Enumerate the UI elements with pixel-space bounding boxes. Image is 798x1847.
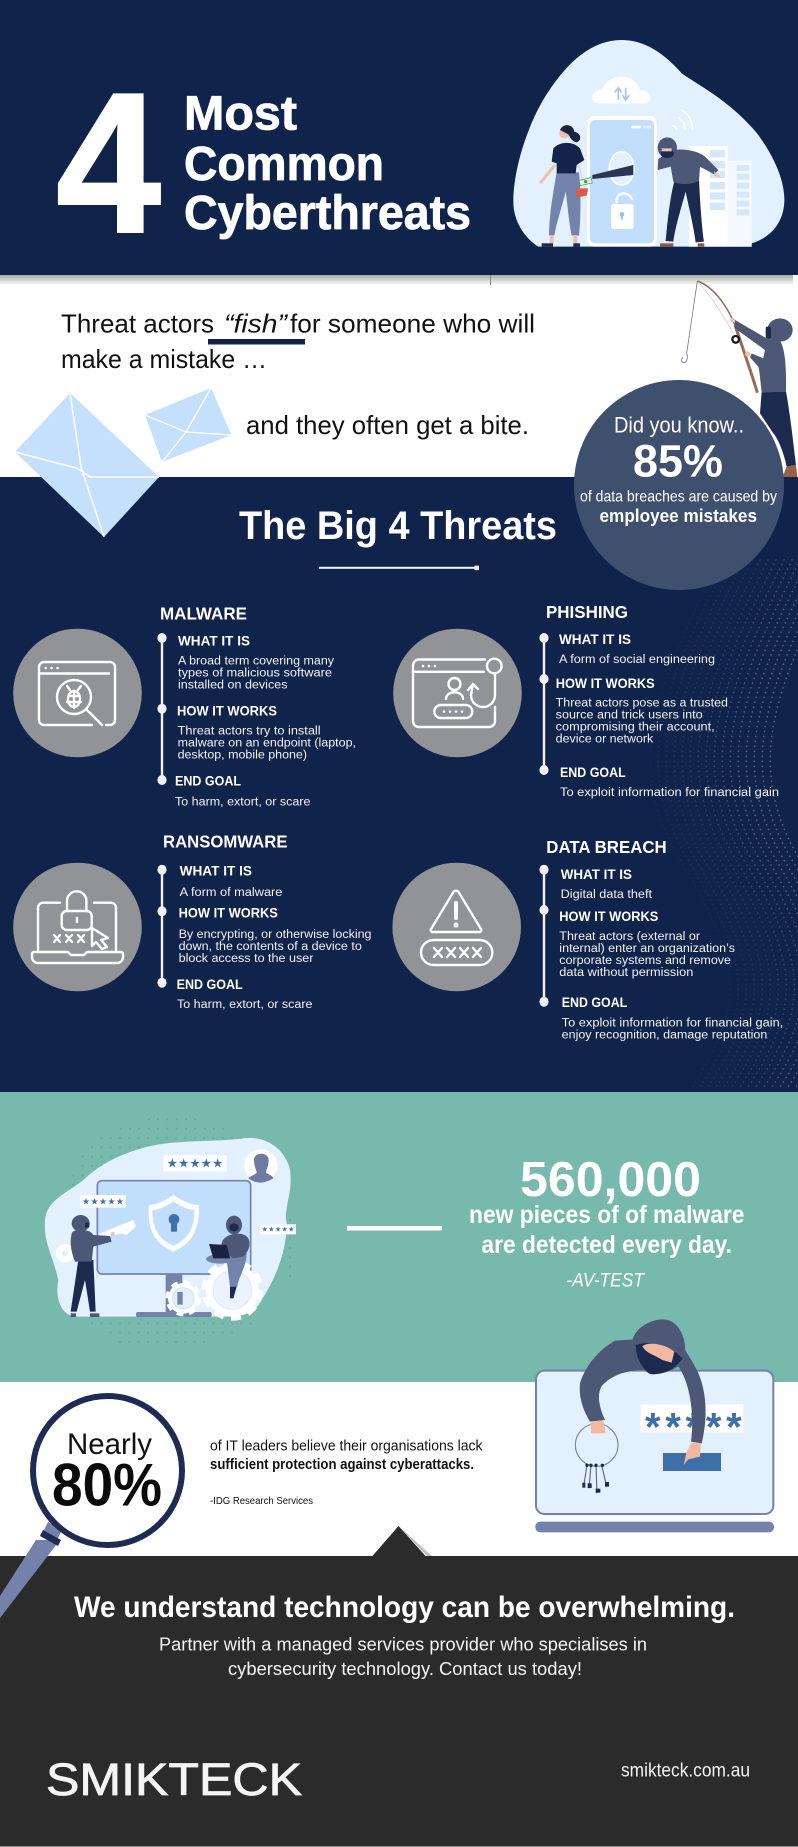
statement line 2: sufficient protection against cyberattacks. xyxy=(210,1457,474,1473)
magnifier lens xyxy=(33,1396,182,1545)
ransomware how it works: By encrypting, or otherwise locking xyxy=(179,929,372,941)
data breach what it is: WHAT IT IS xyxy=(561,867,632,882)
phishing end goal: To exploit information for financial gain xyxy=(560,787,779,799)
call to action heading: We understand technology can be overwhelming. xyxy=(74,1591,735,1624)
title line 2: Common xyxy=(184,138,384,191)
ransomware how it works xyxy=(179,906,372,965)
data breach heading: DATA BREACH xyxy=(546,837,667,857)
malware how it works: Threat actors try to install xyxy=(178,725,321,737)
phishing icon xyxy=(393,629,522,757)
malware how it works: malware on an endpoint (laptop, xyxy=(178,737,356,749)
data breach what it is: Digital data theft xyxy=(561,889,653,901)
divider rule xyxy=(347,1226,442,1230)
ransomware how it works: down, the contents of a device to xyxy=(179,941,362,953)
crouching thief xyxy=(580,1319,706,1465)
data breach end goal: To exploit information for financial gain, xyxy=(562,1018,783,1030)
icon: wifi xyxy=(672,110,692,130)
woman xyxy=(540,125,588,247)
icon: cloud xyxy=(592,77,650,103)
line 1 start: Threat actors xyxy=(61,309,214,339)
statistic figure: 560,000 xyxy=(520,1153,701,1207)
callout figure: 85% xyxy=(633,436,723,487)
website: smikteck.com.au xyxy=(621,1761,750,1782)
phishing heading: PHISHING xyxy=(546,602,628,622)
phishing how it works: Threat actors pose as a trusted xyxy=(556,698,728,710)
malware end goal: To harm, extort, or scare xyxy=(175,797,310,809)
emphasised word: “fish” xyxy=(224,309,288,339)
statistic line 1: new pieces of of malware xyxy=(469,1201,745,1229)
password field large: ★★★★★ xyxy=(167,1155,223,1170)
malware what it is: types of malicious software xyxy=(178,668,332,680)
data breach end goal xyxy=(562,995,783,1042)
icon: large envelope xyxy=(15,393,159,537)
malware end goal xyxy=(175,774,310,809)
underline xyxy=(208,339,305,344)
malware heading: MALWARE xyxy=(160,603,247,623)
magnifier text: Nearly xyxy=(67,1428,152,1461)
phishing end goal xyxy=(560,765,779,799)
avatar xyxy=(244,1149,278,1183)
monitor xyxy=(97,1181,251,1317)
malware timeline xyxy=(157,633,167,785)
logo: SMIKTECK xyxy=(46,1754,302,1805)
teal illustration: password theft xyxy=(45,1119,296,1342)
gears xyxy=(167,1262,260,1318)
callout intro: Did you know.. xyxy=(614,413,744,438)
phishing what it is: WHAT IT IS xyxy=(559,632,631,647)
statement source: -IDG Research Services xyxy=(210,1496,313,1507)
magnifying glass xyxy=(0,1396,182,1618)
ransomware what it is: A form of malware xyxy=(180,887,282,899)
statistic: new malware xyxy=(469,1153,745,1292)
call to action xyxy=(74,1591,735,1679)
laptop screen xyxy=(536,1371,773,1514)
fisherman illustration xyxy=(682,281,797,477)
data breach end goal: enjoy recognition, damage reputation xyxy=(562,1030,767,1042)
password field side: ★★★★★ xyxy=(262,1226,294,1234)
fishing reel xyxy=(732,336,739,343)
phone xyxy=(587,116,657,247)
panel: malware xyxy=(13,603,356,809)
title numeral: 4 xyxy=(56,52,161,275)
laptop base xyxy=(535,1522,774,1532)
data breach how it works: corporate systems and remove xyxy=(559,955,731,967)
phishing how it works: HOW IT WORKS xyxy=(556,676,655,691)
malware what it is: installed on devices xyxy=(178,680,288,692)
server racks xyxy=(689,146,752,247)
data breach how it works xyxy=(559,909,735,979)
callout disc xyxy=(574,380,784,590)
phishing how it works: source and trick users into xyxy=(556,710,703,722)
footer bottom edge xyxy=(0,1846,798,1847)
callout: 85 percent circle xyxy=(574,380,784,590)
magnifier collar xyxy=(40,1530,61,1546)
panel: fish intro text xyxy=(61,309,535,440)
ransomware how it works: HOW IT WORKS xyxy=(179,906,278,921)
malware how it works: desktop, mobile phone) xyxy=(178,749,307,761)
submit button xyxy=(663,1453,721,1471)
phishing what it is xyxy=(559,632,715,666)
ransomware icon xyxy=(13,863,142,991)
section heading: The Big 4 Threats xyxy=(239,504,557,548)
hero illustration: thief reaching through phone xyxy=(513,40,784,247)
data breach how it works: Threat actors (external or xyxy=(559,931,700,943)
dot pattern xyxy=(73,1119,290,1342)
panel: ransomware xyxy=(13,832,371,1011)
data breach end goal: END GOAL xyxy=(562,995,627,1010)
ransomware timeline xyxy=(157,865,167,988)
ransomware heading: RANSOMWARE xyxy=(163,832,288,852)
thief xyxy=(658,137,721,247)
hero blob xyxy=(513,40,784,247)
data breach how it works: HOW IT WORKS xyxy=(559,909,658,924)
password field: ***** xyxy=(645,1405,742,1449)
malware how it works xyxy=(177,704,356,761)
callout text: of data breaches are caused by xyxy=(580,489,777,506)
data breach icon xyxy=(392,863,521,991)
dark footer band xyxy=(0,1556,798,1846)
laptop thief illustration xyxy=(535,1319,774,1532)
ransomware end goal: END GOAL xyxy=(177,977,243,992)
title line 1: Most xyxy=(184,88,297,140)
phishing how it works xyxy=(556,676,728,746)
ransomware what it is: WHAT IT IS xyxy=(180,864,252,879)
key ring xyxy=(575,1424,618,1493)
heading rule xyxy=(319,566,479,570)
stolen money and arm xyxy=(579,165,633,186)
fishing rod xyxy=(697,281,757,393)
blob xyxy=(45,1138,291,1317)
statistic source: -AV-TEST xyxy=(566,1271,645,1292)
ransomware end goal xyxy=(177,977,312,1011)
malware what it is xyxy=(178,634,334,692)
statistic line 2: are detected every day. xyxy=(481,1231,732,1259)
line 2: make a mistake … xyxy=(61,344,267,374)
magnifier figure: 80% xyxy=(52,1452,162,1519)
ransomware end goal: To harm, extort, or scare xyxy=(177,999,312,1011)
phishing what it is: A form of social engineering xyxy=(559,654,715,666)
header shadow xyxy=(0,275,793,285)
fishing line and hook xyxy=(682,281,697,363)
title line 3: Cyberthreats xyxy=(184,187,471,240)
malware what it is: WHAT IT IS xyxy=(178,634,250,649)
fisherman hoodie xyxy=(730,318,793,393)
statement line 1: of IT leaders believe their organisations lack xyxy=(210,1439,483,1455)
callout emphasis: employee mistakes xyxy=(600,506,757,526)
shield xyxy=(149,1195,199,1252)
fisherman legs xyxy=(760,392,796,467)
dotted wave background xyxy=(650,560,798,1090)
teal statistic band xyxy=(0,1092,798,1382)
malware what it is: A broad term covering many xyxy=(178,656,334,668)
phishing timeline xyxy=(539,633,549,775)
navy threats section background xyxy=(0,477,798,1092)
footer pointer xyxy=(372,1526,432,1557)
magnifier neck xyxy=(42,1522,62,1542)
thief with key xyxy=(71,1215,115,1317)
malware icon xyxy=(13,629,142,757)
line 3: and they often get a bite. xyxy=(246,410,529,440)
data breach how it works: internal) enter an organization’s xyxy=(559,943,735,955)
gear left xyxy=(56,1244,74,1263)
call to action line 1: Partner with a managed services provider who specialises in xyxy=(159,1635,647,1655)
fisherman shoe xyxy=(783,465,797,477)
line 1 end: for someone who will xyxy=(290,309,535,339)
malware end goal: END GOAL xyxy=(175,774,241,789)
header band xyxy=(0,0,798,275)
malware how it works: HOW IT WORKS xyxy=(177,704,277,719)
key xyxy=(98,1220,136,1238)
data breach what it is xyxy=(561,867,653,901)
data breach timeline xyxy=(539,865,549,1007)
ransomware how it works: block access to the user xyxy=(179,953,314,965)
phishing end goal: END GOAL xyxy=(560,765,626,780)
call to action line 2: cybersecurity technology. Contact us today! xyxy=(228,1659,582,1679)
panel: data breach xyxy=(392,837,783,1042)
title xyxy=(56,52,471,275)
phishing how it works: device or network xyxy=(556,734,654,746)
panel: phishing xyxy=(393,602,779,799)
data breach how it works: data without permission xyxy=(559,967,693,979)
phishing how it works: compromising their account, xyxy=(556,722,715,734)
ransomware what it is xyxy=(180,864,282,899)
magnifier handle xyxy=(0,1540,60,1618)
password field small: ★★★★★ xyxy=(82,1197,124,1207)
icon: small envelope xyxy=(145,388,232,462)
seated thief with laptop xyxy=(206,1216,249,1298)
statistic: IT leaders xyxy=(210,1439,483,1507)
